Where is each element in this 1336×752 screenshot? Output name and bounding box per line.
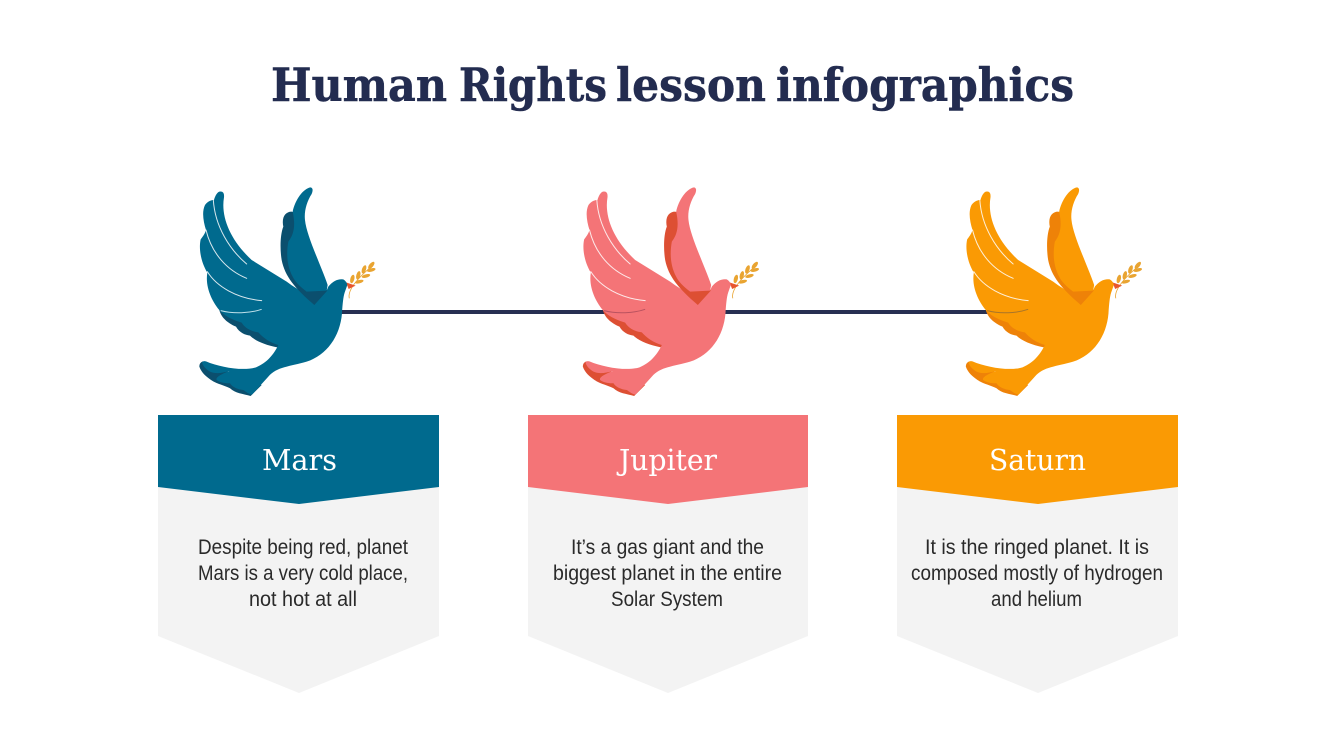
text: Saturn description: It is the ringed planet. It is [925,536,1149,559]
panel: Mars [158,415,439,693]
heading: Saturn: Saturn [989,443,1086,477]
text: Mars description: Mars is a very cold place, [198,562,408,585]
title: Rights [459,58,607,112]
text: Saturn description: composed mostly of hydrogen [911,562,1163,585]
connector line [335,310,995,314]
title [271,58,1074,112]
panel: Saturn [897,415,1178,693]
icon: orange dove [966,187,1142,396]
text: Jupiter description: Solar System [611,588,723,611]
text: Saturn description [911,536,1163,611]
panel: Jupiter [528,415,808,693]
title: lesson [616,58,766,112]
icon: blue dove [199,187,376,396]
text: Mars description [198,536,408,611]
heading: Mars: Mars [262,443,337,477]
text: Mars description: Despite being red, planet [198,536,408,559]
title: infographics [776,58,1074,112]
text: Jupiter description: It’s a gas giant and the [571,536,764,559]
text: Mars description: not hot at all [249,588,357,611]
text: Jupiter description: biggest planet in the entire [553,562,782,585]
heading: Jupiter: Jupiter [616,443,717,477]
icon: pink dove [583,187,759,396]
text: Jupiter description [553,536,782,611]
text: Saturn description: and helium [991,588,1082,611]
title: Human [271,58,447,112]
